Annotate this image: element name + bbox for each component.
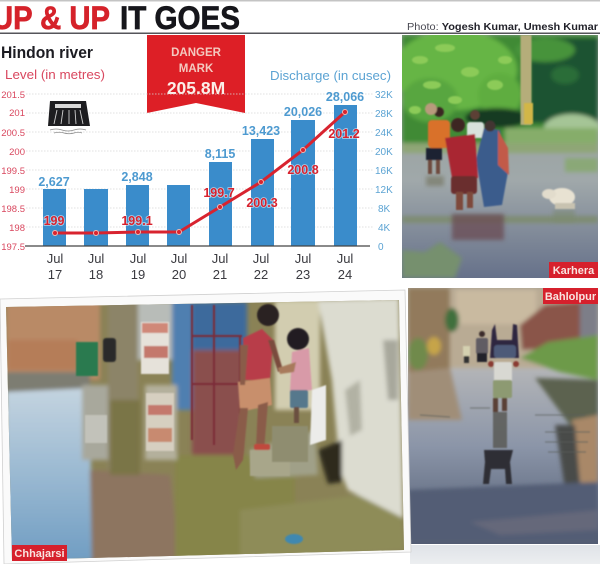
person: red shirt	[445, 134, 478, 178]
x axis labels: 22	[254, 267, 268, 282]
green sign	[76, 342, 98, 376]
x axis labels: 20	[172, 267, 186, 282]
left axis labels: 200	[9, 147, 25, 158]
left axis labels: 199	[9, 185, 25, 196]
danger mark callout: DANGER	[171, 47, 222, 59]
bar value labels: 2,627	[38, 175, 70, 189]
bottom strip	[410, 545, 600, 564]
left axis labels: 201	[9, 108, 25, 119]
level value labels: 200.3	[246, 196, 278, 210]
x axis labels: Jul	[337, 251, 353, 266]
x axis labels: Jul	[171, 251, 187, 266]
right axis labels: 16K	[375, 166, 393, 177]
bar value labels: 8,115	[205, 147, 235, 161]
icon: dam	[48, 101, 90, 134]
sign reflection	[146, 393, 174, 451]
boy	[257, 304, 279, 326]
person: woman in sari	[476, 128, 508, 207]
level value labels	[44, 127, 360, 228]
x axis labels: 21	[213, 267, 227, 282]
right axis labels: 8K	[378, 204, 391, 215]
chart heading: Hindon river	[1, 44, 94, 62]
ripples	[420, 408, 590, 452]
left axis labels: 201.5	[1, 90, 25, 101]
photo: Karhera	[393, 30, 600, 278]
x axis labels: 24	[338, 267, 352, 282]
person: orange shirt	[428, 120, 450, 148]
bar chart	[43, 105, 357, 246]
foliage highlights	[409, 44, 512, 114]
left axis labels: 197.5	[1, 242, 25, 253]
bar value labels: 13,423	[242, 124, 280, 138]
label: Karhera	[549, 262, 598, 278]
x axis labels: 17	[48, 267, 62, 282]
x axis labels: 18	[89, 267, 103, 282]
right axis labels	[375, 90, 393, 253]
man carrying chair	[490, 324, 519, 358]
level value labels: 201.2	[328, 127, 360, 141]
level value labels: 199	[44, 214, 64, 228]
utility pole	[520, 35, 532, 125]
right axis labels: 24K	[375, 128, 393, 139]
label: Bahlolpur: Bahlolpur	[545, 291, 597, 303]
girl	[287, 328, 309, 350]
bar value labels: 28,066	[326, 90, 364, 104]
right axis labels: 20K	[375, 147, 393, 158]
chart panel	[1, 35, 393, 282]
x axis labels: Jul	[130, 251, 146, 266]
photo credit: Photo: Yogesh Kumar, Umesh Kumar	[407, 21, 598, 33]
x axis labels: Jul	[295, 251, 311, 266]
x axis labels: Jul	[212, 251, 228, 266]
title	[0, 0, 240, 36]
x axis labels: Jul	[253, 251, 269, 266]
right axis labels: 4K	[378, 223, 391, 234]
shop sign	[141, 322, 169, 374]
danger mark callout	[147, 35, 245, 113]
baseline	[25, 245, 370, 247]
bar value labels: 20,026	[284, 105, 322, 119]
distant walkers	[476, 338, 488, 354]
level value labels: 199.1	[121, 214, 153, 228]
x axis labels: 23	[296, 267, 310, 282]
left axis labels	[1, 90, 25, 253]
slipper	[285, 534, 303, 544]
right axis labels: 32K	[375, 90, 393, 101]
label: Karhera: Karhera	[553, 265, 595, 277]
x axis labels	[47, 251, 353, 282]
level value labels: 200.8	[287, 163, 319, 177]
x axis labels: Jul	[47, 251, 63, 266]
danger mark callout: 205.8M	[167, 78, 225, 98]
dog	[549, 188, 575, 206]
photo frame	[0, 290, 411, 564]
x axis labels: Jul	[88, 251, 104, 266]
right axis labels: 12K	[375, 185, 393, 196]
person: white shirt	[467, 122, 484, 138]
left axis labels: 198.5	[1, 204, 25, 215]
bar value labels	[38, 90, 364, 189]
label: Chhajarsi: Chhajarsi	[14, 548, 65, 560]
right axis labels: 0	[378, 242, 384, 253]
reflections	[426, 176, 575, 240]
cloth	[310, 385, 326, 445]
photo: Bahlolpur	[408, 288, 598, 544]
level value labels: 199.7	[203, 186, 235, 200]
title: IT GOES	[120, 0, 240, 36]
danger mark callout: MARK	[179, 63, 214, 75]
red gate	[192, 305, 242, 445]
bar value labels: 2,848	[121, 170, 153, 184]
x axis labels: 19	[131, 267, 145, 282]
steps	[250, 450, 290, 476]
grass	[402, 242, 462, 278]
left axis title: Level (in metres)	[5, 67, 105, 82]
left axis labels: 198	[9, 223, 25, 234]
left axis labels: 200.5	[1, 128, 25, 139]
photo: Chhajarsi	[0, 290, 411, 564]
right axis labels: 28K	[375, 109, 393, 120]
right axis title: Discharge (in cusec)	[270, 68, 391, 83]
left axis labels: 199.5	[1, 166, 25, 177]
level line	[52, 110, 348, 236]
label: Chhajarsi	[12, 545, 67, 561]
reflection of man	[493, 412, 507, 448]
